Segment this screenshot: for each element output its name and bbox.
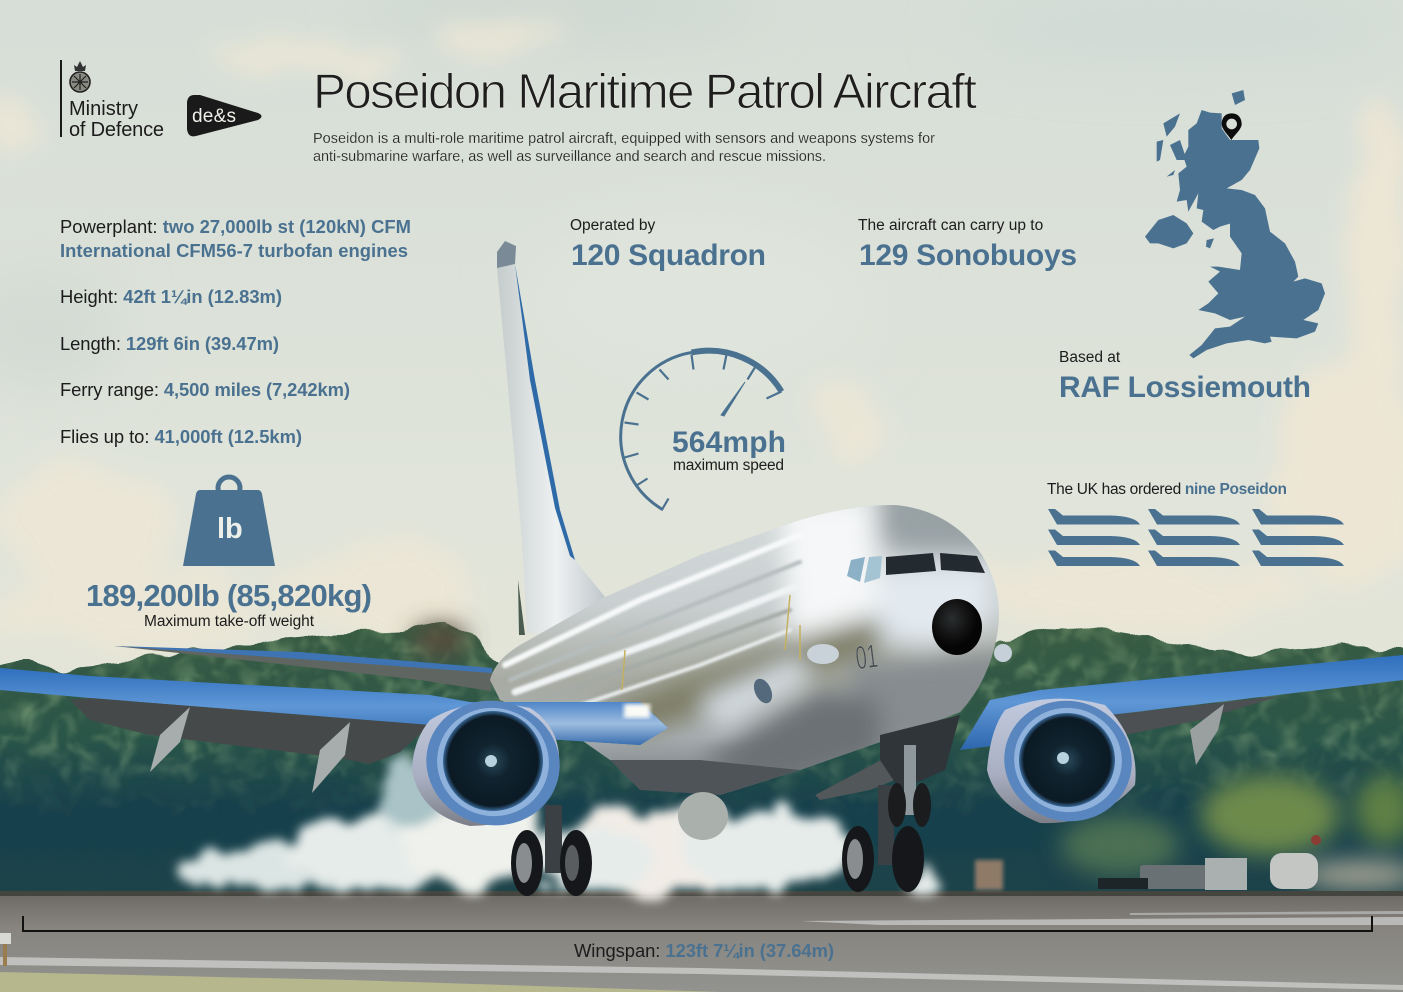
left engine xyxy=(412,686,574,840)
intro text: Poseidon is a multi-role maritime patrol aircraft, equipped with sensors and weapons systems for xyxy=(313,131,935,147)
radome xyxy=(932,599,982,655)
weight: Maximum take-off weight xyxy=(144,613,315,630)
ceiling: Flies up to: 41,000ft (12.5km) xyxy=(60,426,302,447)
logo: de&s: de&s xyxy=(192,106,236,127)
main landing gear left xyxy=(511,805,592,896)
squadron xyxy=(570,217,766,272)
weight: 189,200lb (85,820kg) xyxy=(86,578,372,613)
tyre smoke xyxy=(180,759,943,895)
weight xyxy=(86,477,372,630)
fuselage reflections xyxy=(500,505,998,770)
location pin xyxy=(1222,113,1242,140)
fuselage xyxy=(490,480,1020,795)
speedometer xyxy=(621,351,786,510)
background: runway xyxy=(0,891,1403,992)
base location: RAF Lossiemouth xyxy=(1059,371,1311,404)
logo: Ministry of Defence: Ministry xyxy=(69,98,138,120)
base location xyxy=(1059,349,1311,404)
powerplant xyxy=(60,216,411,261)
fleet size xyxy=(1047,481,1344,566)
logo: de&s xyxy=(187,95,262,136)
cockpit windows xyxy=(847,553,985,583)
wingspan bracket xyxy=(23,916,1372,931)
sonobuoys xyxy=(858,217,1077,272)
right wing xyxy=(960,655,1403,765)
sonobuoys: The aircraft can carry up to xyxy=(858,217,1043,234)
background: tree line xyxy=(0,610,1403,900)
icon: weight xyxy=(183,477,275,566)
left wing xyxy=(0,668,668,793)
ground vehicles xyxy=(975,835,1321,890)
tail fin xyxy=(497,241,605,635)
specification list xyxy=(60,216,411,447)
squadron: 120 Squadron xyxy=(571,239,766,272)
height: Height: 42ft 1¼in (12.83m) xyxy=(60,286,282,307)
length: Length: 129ft 6in (39.47m) xyxy=(60,333,279,354)
right engine xyxy=(987,686,1145,836)
far tailplane xyxy=(114,646,492,691)
logo: Ministry of Defence: of Defence xyxy=(69,119,164,141)
speedometer: maximum speed xyxy=(673,457,784,474)
gauge dial xyxy=(621,351,782,510)
registration: 01 xyxy=(853,637,880,676)
wingspan label: Wingspan: 123ft 7¼in (37.64m) xyxy=(574,940,834,961)
icon: weight: lb xyxy=(217,513,243,545)
ferry range: Ferry range: 4,500 miles (7,242km) xyxy=(60,379,350,400)
ventral pod xyxy=(678,792,728,840)
main landing gear right and nose gear xyxy=(842,715,960,892)
intro text: anti-submarine warfare, as well as surveillance and search and rescue missions. xyxy=(313,149,826,165)
icon: nine aircraft xyxy=(1048,509,1344,566)
speedometer: 564mph xyxy=(672,426,786,459)
aircraft xyxy=(0,241,1403,896)
logo: Ministry of Defence xyxy=(60,60,164,141)
powerplant: International CFM56-7 turbofan engines xyxy=(60,240,408,261)
sonobuoys: 129 Sonobuoys xyxy=(859,239,1077,272)
intro text xyxy=(313,131,935,165)
crest icon xyxy=(70,61,90,92)
title: Poseidon Maritime Patrol Aircraft xyxy=(313,64,977,119)
icon: UK map with pin xyxy=(1145,90,1325,358)
base location: Based at xyxy=(1059,349,1121,366)
fleet size: The UK has ordered nine Poseidon xyxy=(1047,481,1287,498)
powerplant: Powerplant: two 27,000lb st (120kN) CFM xyxy=(60,216,411,237)
needle xyxy=(721,382,745,416)
squadron: Operated by xyxy=(570,217,656,234)
